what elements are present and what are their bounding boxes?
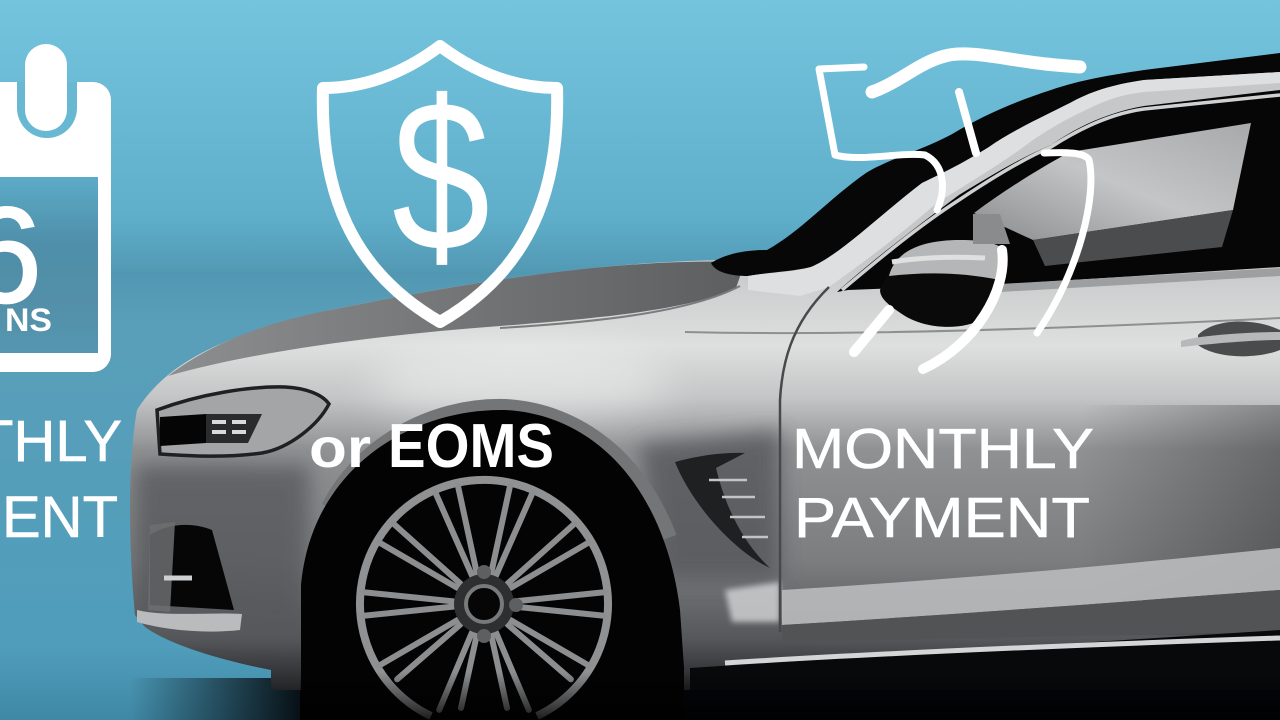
text: monthly payment right: PAYMENT	[794, 486, 1090, 550]
icon: calendar	[0, 44, 111, 372]
side vent	[675, 453, 770, 568]
door lower shading	[1112, 405, 1280, 635]
body shading	[135, 318, 1280, 720]
calendar text: NS	[5, 302, 52, 338]
text: monthly payment left: ENT	[2, 485, 118, 550]
text: middle label: or	[309, 416, 371, 479]
ground under car	[300, 675, 1280, 720]
window glass	[974, 123, 1251, 240]
beltline crease	[685, 318, 1280, 333]
bumper lip	[137, 610, 242, 632]
text: monthly payment right: MONTHLY	[792, 417, 1094, 481]
hood	[168, 262, 745, 376]
icon: shield with dollar sign	[323, 46, 557, 322]
chrome trim line	[842, 95, 1280, 290]
roof	[711, 53, 1280, 276]
window lower glass	[1033, 210, 1233, 266]
foreground shadow	[300, 672, 1280, 720]
roof chrome	[748, 72, 1280, 296]
door dark lower band	[782, 590, 1280, 634]
sill trim	[1000, 268, 1280, 292]
door reflection band	[782, 548, 1280, 625]
wheel	[360, 480, 608, 716]
mirror	[880, 214, 1010, 327]
icon: shield with dollar sign: $	[392, 55, 490, 296]
text: middle label: EOMS	[388, 412, 554, 481]
sill chrome strip	[725, 638, 1280, 663]
text: monthly payment right	[792, 417, 1094, 550]
icon: hand sketch	[819, 54, 1091, 369]
bumper intake	[148, 522, 234, 612]
wheel arch rim	[330, 408, 668, 538]
text: middle label	[309, 412, 554, 481]
door seam	[780, 287, 829, 632]
car body	[130, 70, 1280, 690]
hood seam	[500, 286, 740, 328]
text: monthly payment left	[0, 409, 122, 550]
headlight	[157, 387, 329, 456]
sill	[690, 630, 1280, 690]
ground shadow	[130, 678, 310, 720]
wheel arch	[301, 410, 684, 720]
door handle	[1181, 322, 1280, 356]
window frame	[837, 90, 1280, 292]
